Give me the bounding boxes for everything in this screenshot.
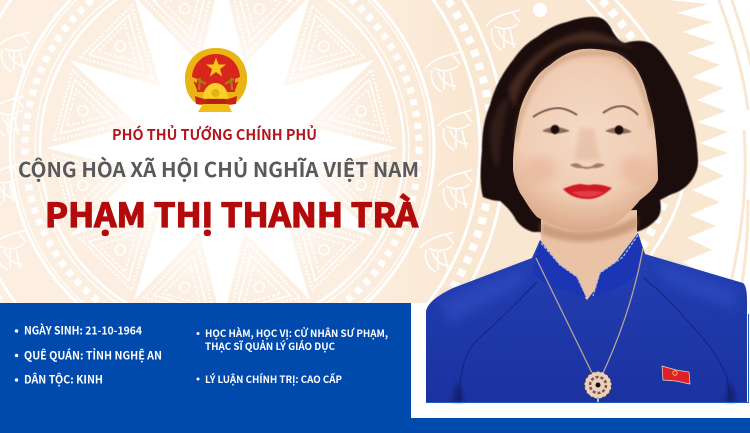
portrait: sleeve shadows [452,378,736,402]
info list: right column: HỌC HÀM, HỌC VỊ: CỬ NHÂN SƯ PHẠM, [205,325,388,340]
portrait: right eye [605,125,632,135]
photo bottom edge and side line [426,314,749,403]
heading: person's name: PHẠM THỊ THANH TRÀ [45,189,419,237]
portrait: hair [481,17,698,232]
info list: left column: NGÀY SINH: 21-10-1964 [24,322,142,338]
portrait: hair highlight [508,31,650,108]
info list: right column [196,325,388,386]
info list: left column: DÂN TỘC: KINH [24,372,103,388]
portrait: shoulder highlights [440,262,735,325]
national emblem [185,48,247,112]
portrait: face [513,49,658,231]
background: bird motifs [0,10,520,272]
portrait: dress [426,233,747,402]
portrait: collar [533,233,643,297]
star wedge decorations [54,0,390,316]
portrait: hairline shadow [516,53,652,140]
portrait: right eyebrow [603,106,638,115]
portrait: nose [570,163,605,169]
portrait: left eyebrow [533,108,577,117]
info list: right column: THẠC SĨ QUẢN LÝ GIÁO DỤC [205,338,335,353]
portrait: neck shadow [541,216,637,242]
portrait: necklace [536,248,643,373]
portrait: brooch [584,372,612,403]
background: bronze drum pattern [0,0,750,303]
portrait: neck [541,210,637,300]
info list: left column [15,322,162,388]
portrait: hair highlight lower [490,96,510,170]
blue information panel [0,303,750,433]
background: right zigzag band [668,0,750,303]
portrait: collar trim [541,235,638,296]
portrait [426,17,747,403]
star with twelve points [46,0,398,324]
white photo frame [411,303,750,418]
heading: office title: PHÓ THỦ TƯỚNG CHÍNH PHỦ [112,124,317,145]
portrait: nose shadow [574,128,600,160]
portrait: lips [563,184,612,199]
portrait: left eye [542,125,570,134]
portrait: cheeks [524,156,648,184]
portrait: party flag pin [662,366,690,384]
info list: right column: LÝ LUẬN CHÍNH TRỊ: CAO CẤP [205,371,342,386]
portrait: sleeve seams [460,277,730,402]
info list: left column: QUÊ QUÁN: TỈNH NGHỆ AN [24,348,162,364]
heading: country name: CỘNG HÒA XÃ HỘI CHỦ NGHĨA VIỆT NAM [18,154,419,183]
